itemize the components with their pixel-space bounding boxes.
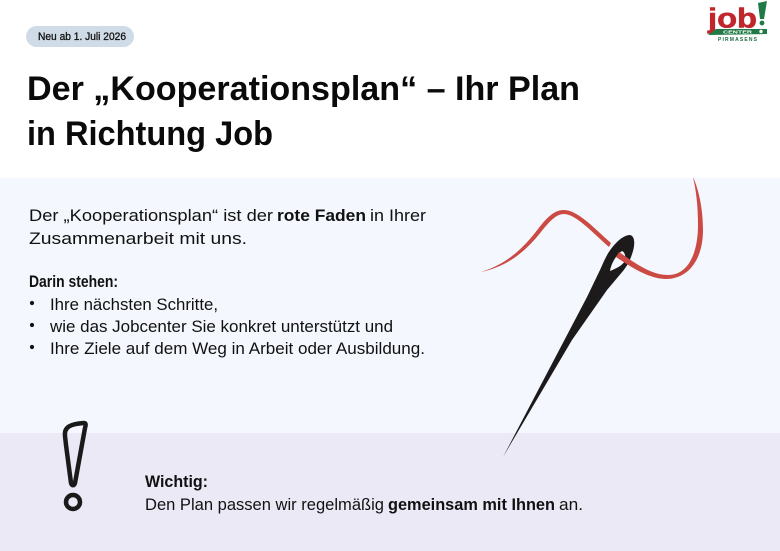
text block: list: Ihre nächsten Schritte, (50, 295, 218, 314)
title: Der „Kooperationsplan“ – Ihr Plan (27, 70, 580, 108)
text block: important: Den Plan passen wir regelmäßig (145, 495, 384, 514)
text block: list: Ihre Ziele auf dem Weg in Arbeit oder Ausbildung. (50, 339, 425, 358)
badge: date (26, 26, 134, 47)
badge: date: Neu ab 1. Juli 2026 (38, 31, 126, 43)
text block: important: gemeinsam mit Ihnen (388, 496, 555, 514)
text block: list: wie das Jobcenter Sie konkret unterstützt und (49, 317, 393, 336)
text block: important: Wichtig: (145, 473, 208, 491)
text block: important: an. (559, 495, 583, 514)
text block: intro: in Ihrer (370, 206, 426, 225)
text block: intro: Der „Kooperationsplan“ ist der (29, 206, 273, 225)
text block: intro: rote Faden (277, 207, 366, 225)
text block: important (145, 473, 583, 514)
text block: intro (29, 206, 426, 248)
title: in Richtung Job (27, 115, 273, 153)
icon: needle and thread (481, 177, 703, 457)
text block: list (29, 273, 425, 358)
icon: exclamation mark (65, 423, 86, 509)
text block: list: Darin stehen: (29, 273, 118, 291)
title (27, 70, 580, 153)
panel: explanation (0, 178, 780, 433)
logo: jobcenter Pirmasens: PIRMASENS (718, 37, 758, 43)
logo: jobcenter Pirmasens (707, 1, 767, 43)
panel: important note (0, 433, 780, 551)
logo: jobcenter Pirmasens: CENTER (723, 30, 753, 36)
logo: jobcenter Pirmasens: job (707, 2, 757, 34)
text block: intro: Zusammenarbeit mit uns. (29, 229, 247, 248)
